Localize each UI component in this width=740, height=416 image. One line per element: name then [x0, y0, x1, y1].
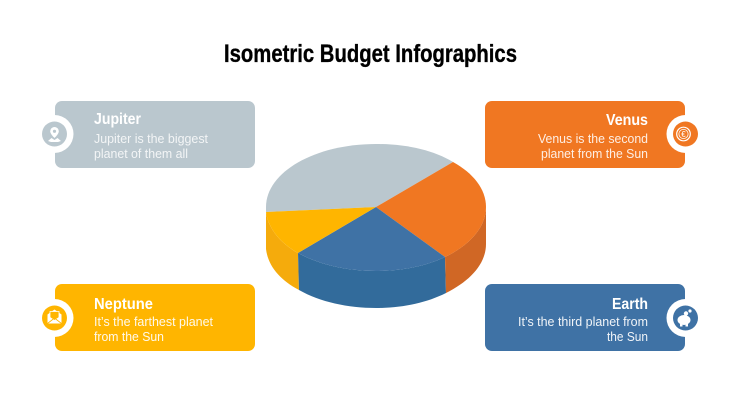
- Earth description: It’s the third planet from: [518, 315, 648, 329]
- panel: Venus: [485, 101, 704, 168]
- icon: map pin: [36, 115, 74, 153]
- Neptune card: [55, 284, 255, 351]
- panel: Earth: [485, 284, 704, 351]
- panel: Jupiter: [36, 101, 255, 168]
- pie slice: yellow: [266, 207, 376, 253]
- Jupiter description: [94, 132, 209, 161]
- icon: open envelope: [36, 299, 74, 337]
- Earth card: [485, 284, 685, 351]
- icon: euro coin: €: [681, 130, 686, 139]
- Venus heading: Venus: [606, 112, 648, 129]
- Neptune description: from the Sun: [94, 330, 164, 344]
- panel: Neptune: [36, 284, 255, 351]
- Earth description: [518, 315, 648, 344]
- Jupiter card: [55, 101, 255, 168]
- Venus description: Venus is the second: [538, 132, 648, 146]
- title: Isometric Budget Infographics: [224, 40, 517, 68]
- pie slice: blue: [298, 207, 445, 271]
- Venus description: planet from the Sun: [541, 147, 648, 161]
- chart: isometric pie: [266, 144, 486, 308]
- pie slice: orange: [376, 162, 486, 257]
- pie side: orange: [445, 207, 486, 293]
- Earth description: the Sun: [607, 330, 648, 344]
- Neptune description: It’s the farthest planet: [94, 315, 214, 329]
- icon: piggy bank: [666, 299, 704, 337]
- Earth heading: Earth: [612, 296, 648, 313]
- Neptune heading: Neptune: [94, 296, 153, 313]
- Jupiter description: Jupiter is the biggest: [94, 132, 209, 146]
- Jupiter heading: Jupiter: [94, 111, 141, 128]
- Jupiter description: planet of them all: [94, 147, 188, 161]
- pie side: blue: [298, 253, 446, 308]
- pie side: yellow: [266, 212, 299, 290]
- pie slice: grey: [266, 144, 453, 212]
- icon: euro coin: [666, 115, 704, 153]
- Venus description: [538, 132, 648, 161]
- Venus card: [485, 101, 685, 168]
- Neptune description: [94, 315, 214, 344]
